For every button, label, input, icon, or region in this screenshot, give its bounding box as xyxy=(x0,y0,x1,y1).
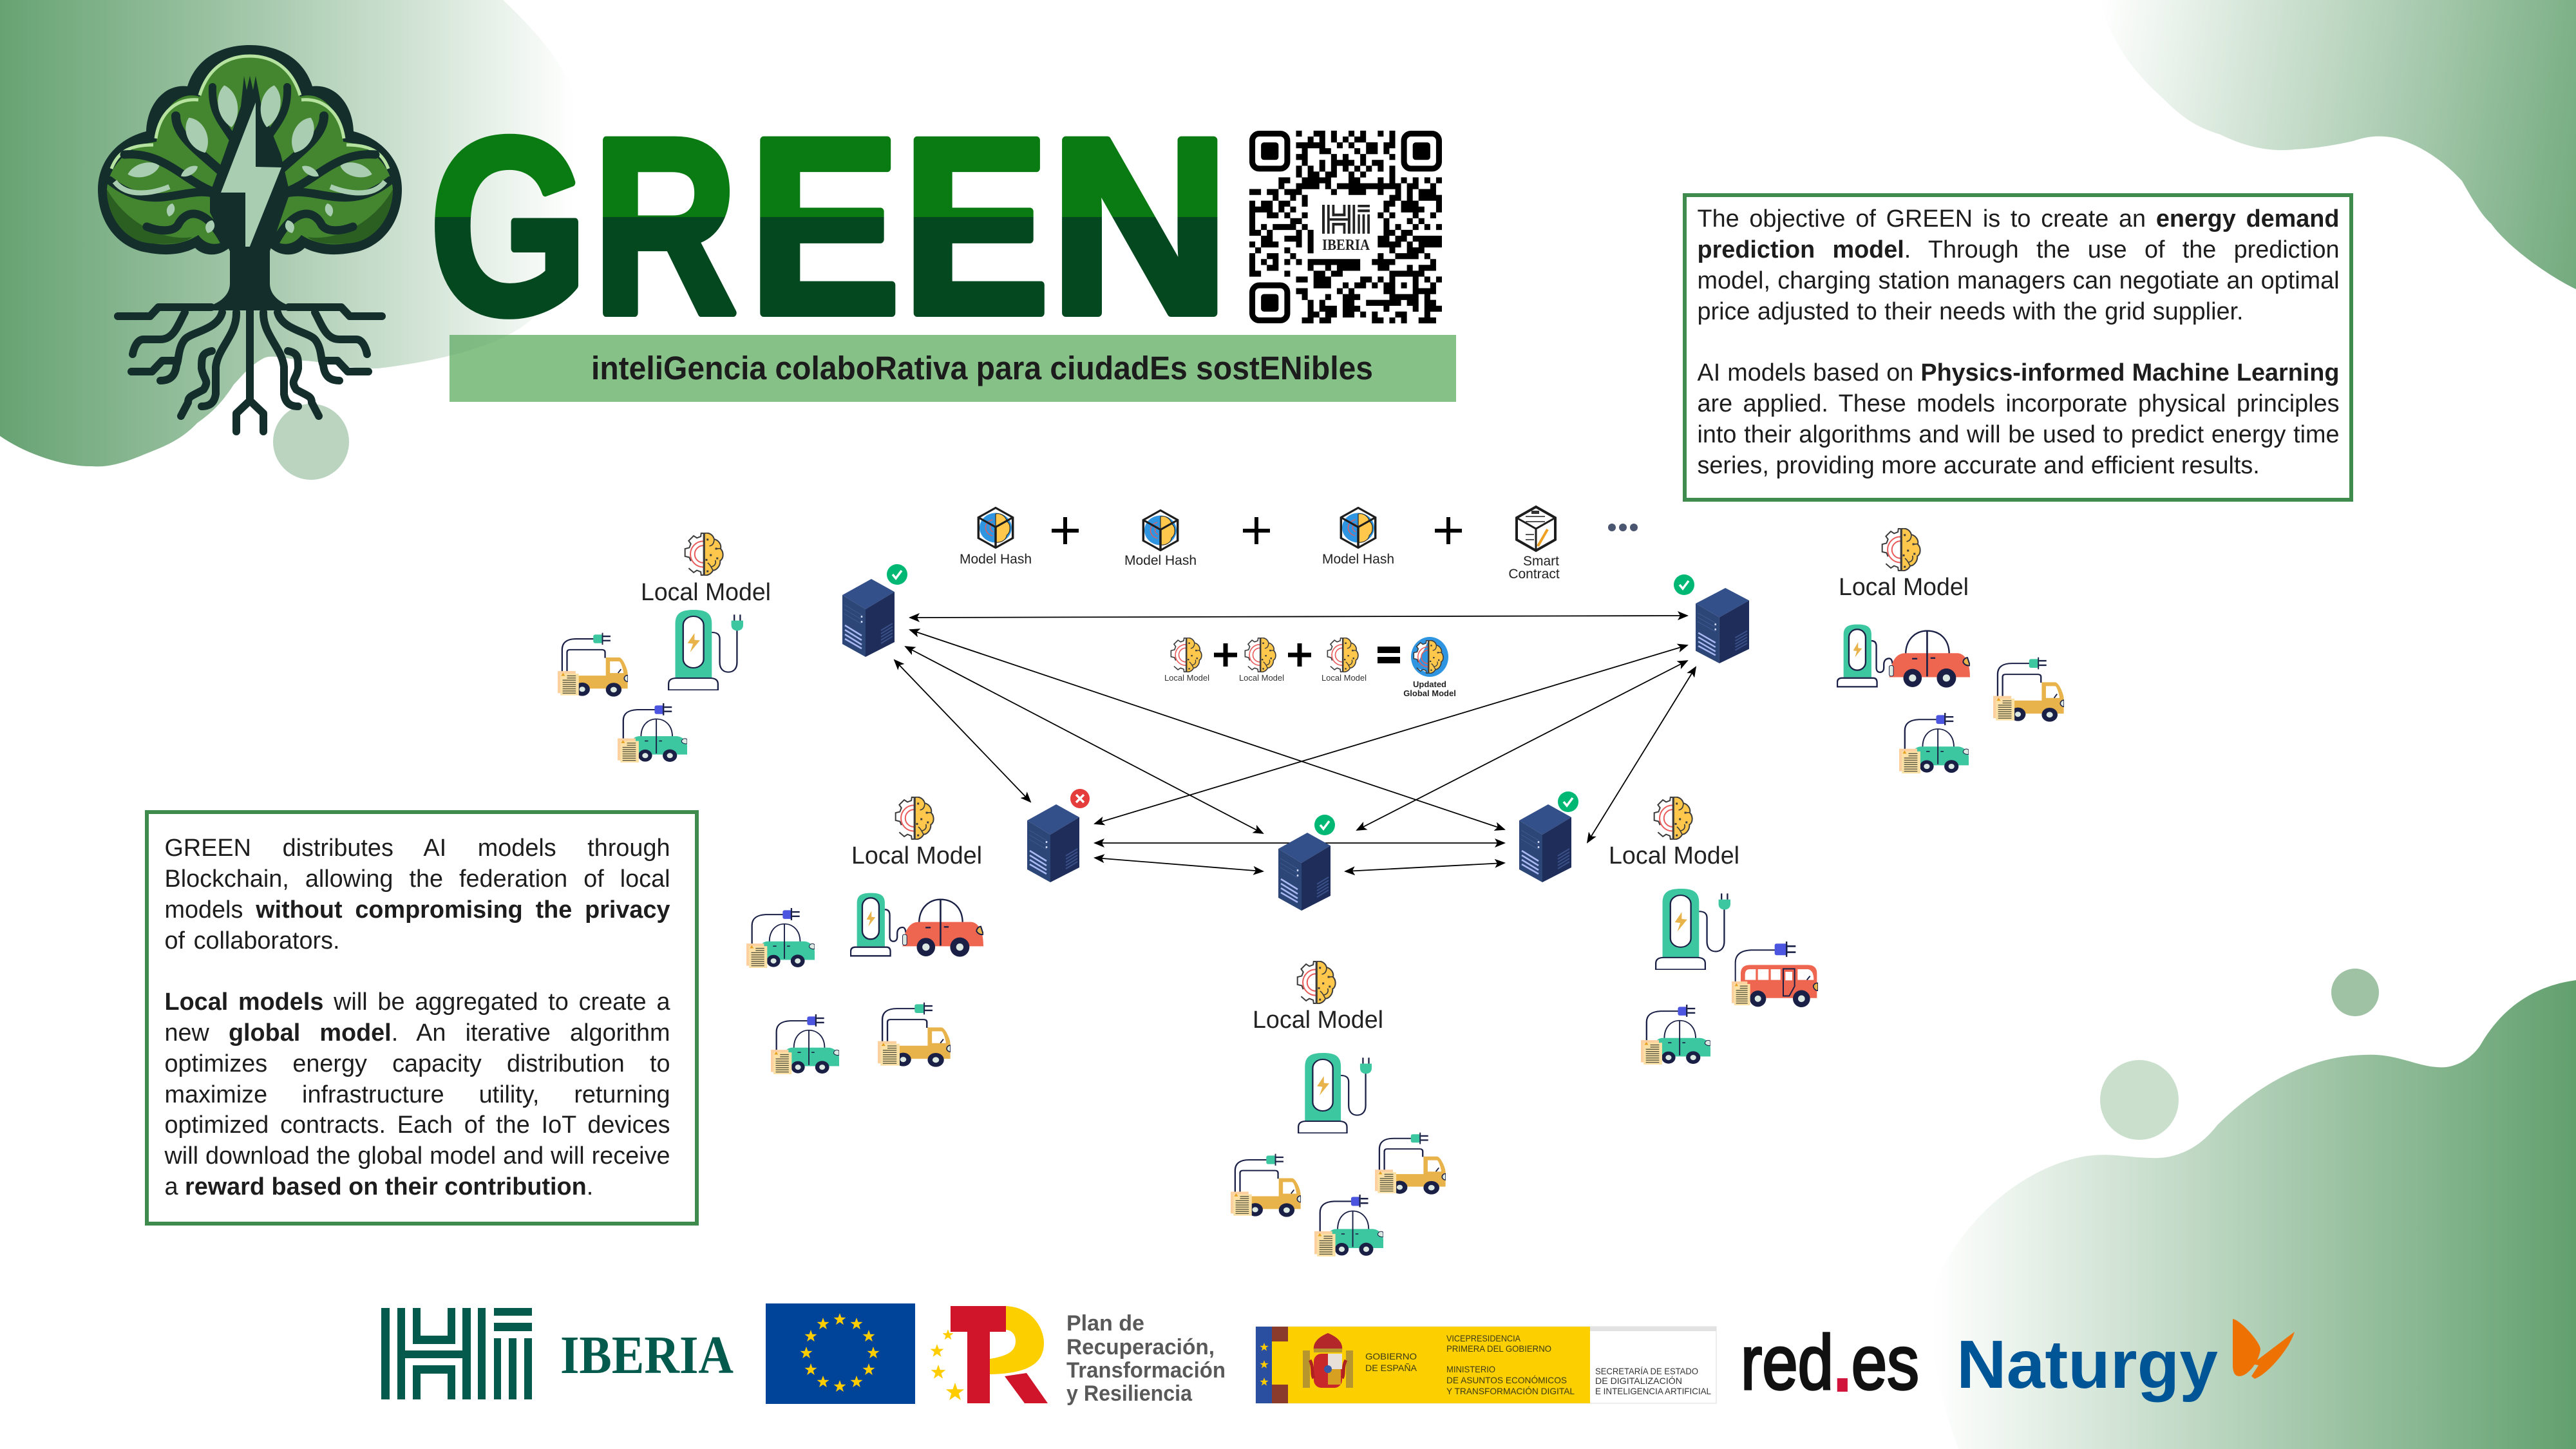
title: GREEN: E xyxy=(748,86,901,367)
title: GREEN: G xyxy=(430,86,588,367)
text block: federation: optimized contracts. Each of the IoT devices xyxy=(165,1112,670,1139)
logo: Gobierno de España: DE ESPAÑA xyxy=(1365,1363,1417,1373)
icon: smart contract xyxy=(1517,507,1555,551)
logo: Gobierno de España: SECRETARÍA DE ESTADO xyxy=(1595,1366,1698,1376)
background blob: bottom right xyxy=(1932,980,2576,1449)
text block: federation: new global model. An iterative algorithm xyxy=(165,1019,670,1046)
text block: objective: are applied. These models incorporate physical principles xyxy=(1698,390,2339,417)
icon: tree logo xyxy=(98,45,402,431)
logo: Naturgy xyxy=(1956,1319,2295,1403)
logo: Gobierno de España: Y TRANSFORMACIÓN DIGITAL xyxy=(1446,1386,1575,1396)
logo: Iberia: IBERIA xyxy=(560,1325,734,1385)
text block: federation: GREEN distributes AI models through xyxy=(165,835,670,862)
subtitle bar xyxy=(450,335,1456,402)
local model cluster: bottom: Local Model xyxy=(1253,1007,1383,1034)
logo: Gobierno de España: E INTELIGENCIA ARTIFICIAL xyxy=(1595,1386,1711,1396)
logo: Gobierno de España: PRIMERA DEL GOBIERNO xyxy=(1446,1343,1551,1354)
text block: federation: will download the global model and will receive xyxy=(165,1142,670,1170)
logo: EU flag xyxy=(766,1303,915,1404)
QR code xyxy=(1249,134,1442,320)
logo: Plan de Recuperación: y Resiliencia xyxy=(1066,1381,1193,1406)
local model cluster: top right: Local Model xyxy=(1839,574,1969,601)
blockchain row: model hashes: Contract xyxy=(1508,567,1560,582)
logo: red.es: red.es xyxy=(1741,1320,1919,1406)
server node: rejected xyxy=(1027,789,1090,882)
text block: objective xyxy=(1683,193,2353,502)
aggregation formula: Local Model xyxy=(1164,673,1209,683)
local model cluster: top left xyxy=(558,533,771,762)
aggregation formula: Updated xyxy=(1413,679,1446,689)
network arrows xyxy=(895,616,1696,871)
server node: top right xyxy=(1674,574,1749,663)
title: GREEN: R xyxy=(592,86,737,366)
text block: objective: price adjusted to their needs with the grid supplier. xyxy=(1698,298,2244,325)
blockchain row: model hashes: Model Hash xyxy=(1124,553,1197,568)
local model cluster: bottom xyxy=(1231,961,1446,1256)
text block: federation: a reward based on their contribution. xyxy=(165,1173,593,1200)
text block: federation: of collaborators. xyxy=(165,927,340,954)
text block: federation: Local models will be aggregated to create a xyxy=(165,989,670,1016)
title: GREEN: E xyxy=(902,85,1050,366)
logo: Gobierno de España: DE DIGITALIZACIÓN xyxy=(1595,1376,1682,1386)
local model cluster: left xyxy=(746,797,983,1074)
logo: Gobierno de España: GOBIERNO xyxy=(1365,1351,1417,1361)
server node: right xyxy=(1519,791,1578,882)
decorative circle: top left xyxy=(273,404,349,480)
logo: Gobierno de España: DE ASUNTOS ECONÓMICOS xyxy=(1446,1375,1567,1385)
text block: objective: AI models based on Physics-informed Machine Learning xyxy=(1698,359,2339,386)
logo: Gobierno de España xyxy=(1256,1327,1716,1403)
text block: federation xyxy=(145,810,699,1226)
aggregation formula: Local Model xyxy=(1321,673,1367,683)
text block: federation: models without compromising the privacy xyxy=(165,896,670,923)
blockchain row: model hashes xyxy=(960,507,1638,582)
text block: objective: into their algorithms and will be used to predict energy time xyxy=(1698,421,2339,448)
text block: federation: maximize infrastructure utility, returning xyxy=(165,1081,670,1108)
aggregation formula xyxy=(1164,637,1456,698)
text block: objective: The objective of GREEN is to create an energy demand xyxy=(1698,205,2339,232)
background blob: top left xyxy=(0,0,576,466)
blockchain row: model hashes: Smart xyxy=(1523,554,1559,569)
logo: Plan de Recuperación: Transformación xyxy=(1066,1358,1226,1383)
aggregation formula: Local Model xyxy=(1239,673,1284,683)
text block: federation: Blockchain, allowing the federation of local xyxy=(165,866,670,893)
logo: Plan de Recuperación: Recuperación, xyxy=(1066,1335,1215,1359)
local model cluster: top left: Local Model xyxy=(641,579,771,606)
title: GREEN: N xyxy=(1049,86,1231,366)
logo: Plan de Recuperación: Plan de xyxy=(1066,1311,1144,1336)
logo: Gobierno de España: VICEPRESIDENCIA xyxy=(1446,1333,1521,1343)
logo: Gobierno de España: MINISTERIO xyxy=(1446,1364,1495,1374)
text block: objective: model, charging station managers can negotiate an optimal xyxy=(1698,267,2339,294)
logo: Iberia xyxy=(381,1308,734,1399)
local model cluster: right: Local Model xyxy=(1609,842,1739,869)
icon: coat of arms xyxy=(1303,1333,1353,1388)
server node: top left xyxy=(842,564,907,657)
local model cluster: left: Local Model xyxy=(851,842,982,869)
text block: objective: series, providing more accurate and efficient results. xyxy=(1698,452,2260,479)
text block: federation: optimizes energy capacity distribution to xyxy=(165,1050,670,1077)
logo: Plan de Recuperación xyxy=(931,1306,1226,1406)
aggregation formula: Global Model xyxy=(1403,688,1456,698)
subtitle text: inteliGencia colaboRativa para ciudadEs sostENibles xyxy=(591,350,1373,386)
decorative circle: bottom right small xyxy=(2331,969,2379,1016)
background blob: top right xyxy=(2100,0,2576,289)
local model cluster: top right xyxy=(1837,529,2064,773)
local model cluster: right xyxy=(1609,797,1818,1065)
title: GREEN xyxy=(430,85,1231,367)
blockchain row: model hashes: Model Hash xyxy=(960,552,1032,567)
decorative circle: bottom right large xyxy=(2100,1060,2179,1140)
blockchain row: model hashes: Model Hash xyxy=(1322,552,1394,567)
server node: middle xyxy=(1278,815,1335,911)
text block: objective: prediction model. Through the use of the prediction xyxy=(1698,236,2339,263)
logo: Naturgy: Naturgy xyxy=(1956,1327,2218,1403)
QR code: IBERIA xyxy=(1322,237,1370,254)
